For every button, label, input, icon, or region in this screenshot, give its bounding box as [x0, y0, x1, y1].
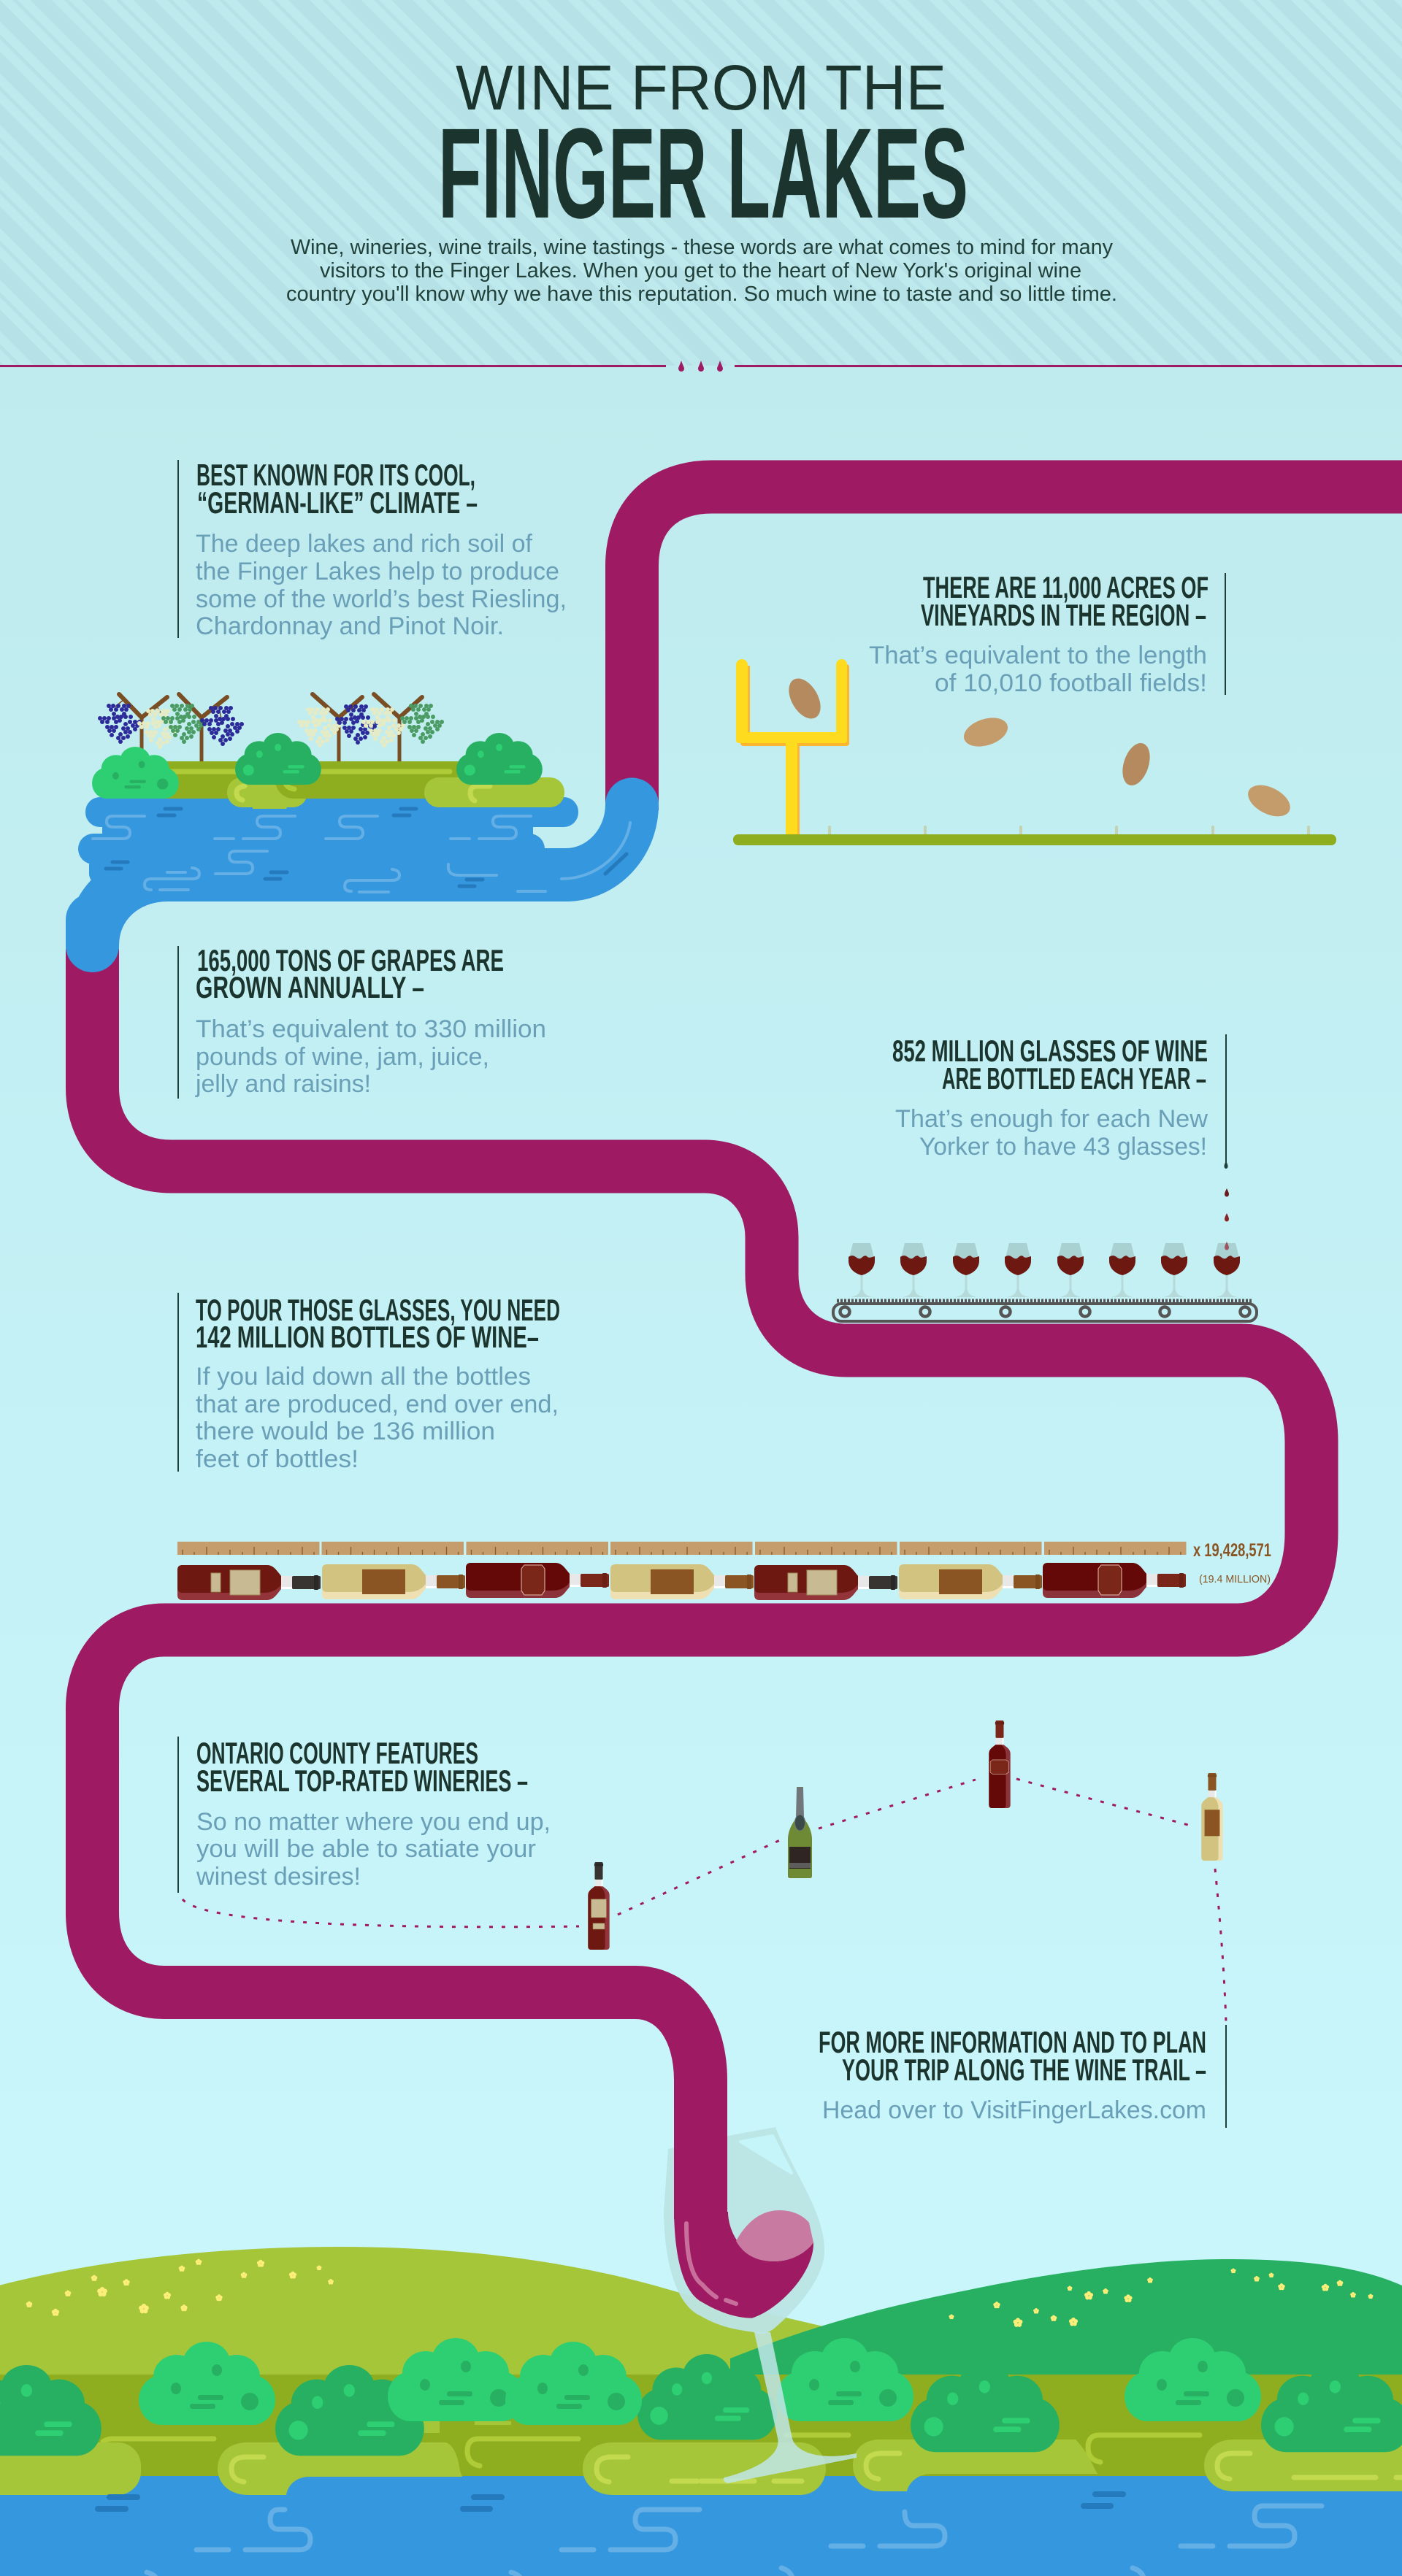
river bottom: [0, 2476, 1402, 2576]
dotted trail: [183, 1779, 1226, 2023]
right hill: [730, 2259, 1402, 2409]
text block: cool climate: BEST KNOWN FOR ITS COOL,: [196, 458, 475, 492]
conveyor and wine glasses: [833, 1188, 1257, 1321]
striped header background: [0, 0, 1402, 366]
landscape panel: [0, 2247, 1402, 2576]
text block: bottles: there would be 136 million: [196, 1418, 495, 1445]
icon: wine drops: [1225, 1188, 1229, 1250]
icon: glasses: [849, 1243, 1240, 1297]
footballs: [782, 673, 1295, 823]
text block: glasses: That’s enough for each New: [895, 1105, 1208, 1133]
intro text: visitors to the Finger Lakes. When you get to the heart of New York's original wine: [320, 259, 1081, 282]
text block: grapes: 165,000 TONS OF GRAPES ARE: [197, 943, 504, 977]
icon: dark red bottle: [989, 1720, 1011, 1808]
text block: glasses: [892, 1034, 1228, 1169]
vineyard and lake illustration: [78, 694, 632, 947]
intro text: [286, 236, 1117, 306]
dark green bushes: [0, 2354, 1402, 2456]
text block: cool climate: [178, 458, 567, 640]
ground curls: [103, 2421, 1200, 2466]
bright green bushes: [139, 2338, 1261, 2425]
flowers on left hill: [26, 2259, 334, 2316]
text block: grapes: That’s equivalent to 330 million: [196, 1015, 546, 1043]
text block: bottles: feet of bottles!: [196, 1445, 359, 1473]
rulers and bottles row: [177, 1540, 1271, 1600]
olive ground band: [0, 2375, 1402, 2480]
text block: wineries: you will be able to satiate your: [196, 1835, 536, 1863]
land banks: [165, 761, 564, 809]
flowers on right hill: [949, 2268, 1373, 2327]
text block: grapes: GROWN ANNUALLY –: [196, 970, 424, 1004]
divider with drops: [0, 361, 1402, 372]
icon: red bottle: [588, 1862, 610, 1950]
icon: sparkling bottle: [788, 1787, 812, 1878]
wine in bowl: [674, 2212, 813, 2318]
winery trail map: [183, 1720, 1226, 2023]
text block: cool climate: some of the world’s best Riesling,: [196, 585, 567, 613]
text block: cool climate: the Finger Lakes help to produce: [196, 558, 559, 585]
text block: grapes: pounds of wine, jam, juice,: [196, 1043, 489, 1071]
text block: more information: [819, 2025, 1226, 2128]
title: wine from the: WINE FROM THE: [456, 53, 946, 123]
bank curls: [231, 2453, 1402, 2482]
text block: wineries: winest desires!: [196, 1863, 361, 1891]
text block: acres: THERE ARE 11,000 ACRES OF: [923, 570, 1208, 604]
lake waves: [92, 809, 630, 947]
intro text: country you'll know why we have this reputation. So much wine to taste and so little time.: [286, 282, 1117, 306]
icon: conveyor belt: [833, 1301, 1257, 1321]
glass stem and foot: [724, 2332, 857, 2483]
blue cap over wine: [66, 920, 119, 946]
icon: white wine bottle: [1201, 1773, 1223, 1861]
river waves: [98, 2494, 1322, 2576]
multiplier label: x 19,428,571: [1193, 1540, 1271, 1561]
text block: acres: VINEYARDS IN THE REGION –: [921, 598, 1206, 632]
text block: cool climate: The deep lakes and rich soil of: [196, 530, 533, 558]
field ground: [733, 834, 1336, 845]
river banks: [0, 2439, 1402, 2495]
text block: acres: [869, 570, 1225, 697]
text block: cool climate: Chardonnay and Pinot Noir.: [196, 612, 504, 640]
text block: glasses: 852 MILLION GLASSES OF WINE: [892, 1034, 1208, 1068]
giant wine glass: [635, 1993, 857, 2483]
wine river middle segments: [92, 949, 1311, 1993]
text block: grapes: [178, 943, 546, 1099]
text block: cool climate: “GERMAN-LIKE” CLIMATE –: [197, 485, 478, 520]
million label: (19.4 MILLION): [1199, 1573, 1271, 1585]
text block: glasses: ARE BOTTLED EACH YEAR –: [942, 1061, 1206, 1096]
wine highlights: [686, 2223, 736, 2304]
icon: grape vines: [98, 694, 444, 761]
header panel: [0, 0, 1402, 372]
text block: acres: That’s equivalent to the length: [869, 642, 1207, 669]
text block: wineries: So no matter where you end up,: [196, 1808, 551, 1836]
text block: more information: YOUR TRIP ALONG THE WINE TRAIL –: [842, 2053, 1206, 2087]
text block: wineries: ONTARIO COUNTY FEATURES: [196, 1736, 478, 1770]
title: finger lakes: FINGER LAKES: [438, 102, 968, 245]
intro text: Wine, wineries, wine trails, wine tastings - these words are what comes to mind for many: [291, 236, 1113, 259]
rulers: [177, 1542, 1186, 1555]
bushes: [92, 733, 543, 799]
text block: bottles: 142 MILLION BOTTLES OF WINE–: [196, 1320, 539, 1354]
text block: bottles: If you laid down all the bottles: [196, 1363, 531, 1391]
icon: goalpost: [736, 659, 849, 834]
text block: bottles: that are produced, end over end,: [196, 1391, 559, 1418]
wine pouring in: [635, 1993, 701, 2219]
lake water: [78, 797, 632, 946]
text block: glasses: Yorker to have 43 glasses!: [919, 1133, 1207, 1161]
text block: more information: Head over to VisitFingerLakes.com: [822, 2096, 1206, 2124]
yard markers: [830, 827, 1309, 834]
bottles lying end to end: [177, 1563, 1186, 1600]
wine river upper segment: [632, 487, 1402, 810]
text block: wineries: SEVERAL TOP-RATED WINERIES –: [196, 1764, 528, 1798]
glass window highlight: [740, 2136, 792, 2173]
text block: bottles: TO POUR THOSE GLASSES, YOU NEED: [196, 1293, 560, 1327]
text block: wineries: [178, 1736, 551, 1893]
glass bowl: [664, 2127, 824, 2334]
text block: acres: of 10,010 football fields!: [935, 669, 1207, 697]
left hill: [0, 2247, 832, 2409]
text block: grapes: jelly and raisins!: [195, 1070, 371, 1098]
football field illustration: [733, 659, 1336, 845]
text block: bottles: [178, 1293, 560, 1473]
wine surface: [736, 2210, 813, 2261]
